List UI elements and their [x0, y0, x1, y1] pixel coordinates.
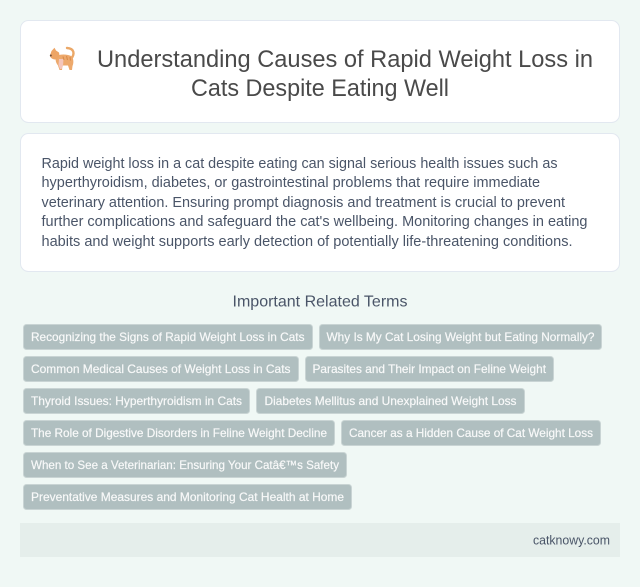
tag: When to See a Veterinarian: Ensuring Your Catâ€™s Safety: [31, 458, 339, 472]
tag: [342, 420, 600, 446]
tag: [306, 356, 554, 382]
tag list: [24, 324, 602, 510]
tag: [256, 388, 524, 414]
summary text: [42, 156, 588, 250]
footer source text: catknowy.com: [533, 534, 610, 548]
summary text: veterinary attention. Ensuring prompt diagnosis and treatment is crucial to prevent: [42, 195, 565, 211]
summary text: hyperthyroidism, diabetes, or gastrointestinal problems that require immediate: [42, 175, 540, 191]
tag: [320, 324, 602, 350]
panel: title card: [20, 20, 620, 122]
heading: important related terms: Important Related Terms: [232, 294, 408, 310]
footer: [20, 523, 620, 557]
tag: Parasites and Their Impact on Feline Weight: [312, 362, 547, 376]
tag: [24, 388, 250, 414]
title: Understanding Causes of Rapid Weight Loss in: [97, 46, 593, 73]
tag: [24, 484, 352, 510]
tag: Why Is My Cat Losing Weight but Eating Normally?: [326, 330, 595, 344]
tag: The Role of Digestive Disorders in Feline Weight Decline: [31, 426, 327, 440]
summary text: habits and weight supports early detection of potentially life-threatening conditions.: [42, 234, 572, 250]
tag: [24, 324, 312, 350]
tag: Diabetes Mellitus and Unexplained Weight Loss: [264, 394, 516, 408]
tag: Thyroid Issues: Hyperthyroidism in Cats: [31, 394, 242, 408]
tag: Cancer as a Hidden Cause of Cat Weight Loss: [349, 426, 593, 440]
tag: Common Medical Causes of Weight Loss in Cats: [31, 362, 290, 376]
tag: Recognizing the Signs of Rapid Weight Loss in Cats: [31, 330, 304, 344]
title: [97, 46, 593, 102]
panel: summary card: [20, 134, 620, 272]
summary text: further complications and safeguard the cat's wellbeing. Monitoring changes in eating: [42, 214, 588, 230]
tag: [24, 356, 298, 382]
tag: [24, 420, 334, 446]
tag: Preventative Measures and Monitoring Cat Health at Home: [31, 490, 344, 504]
icon: cat: [50, 48, 73, 70]
title: Cats Despite Eating Well: [191, 75, 449, 102]
tag: [24, 452, 346, 478]
summary text: Rapid weight loss in a cat despite eating can signal serious health issues such as: [42, 156, 558, 172]
